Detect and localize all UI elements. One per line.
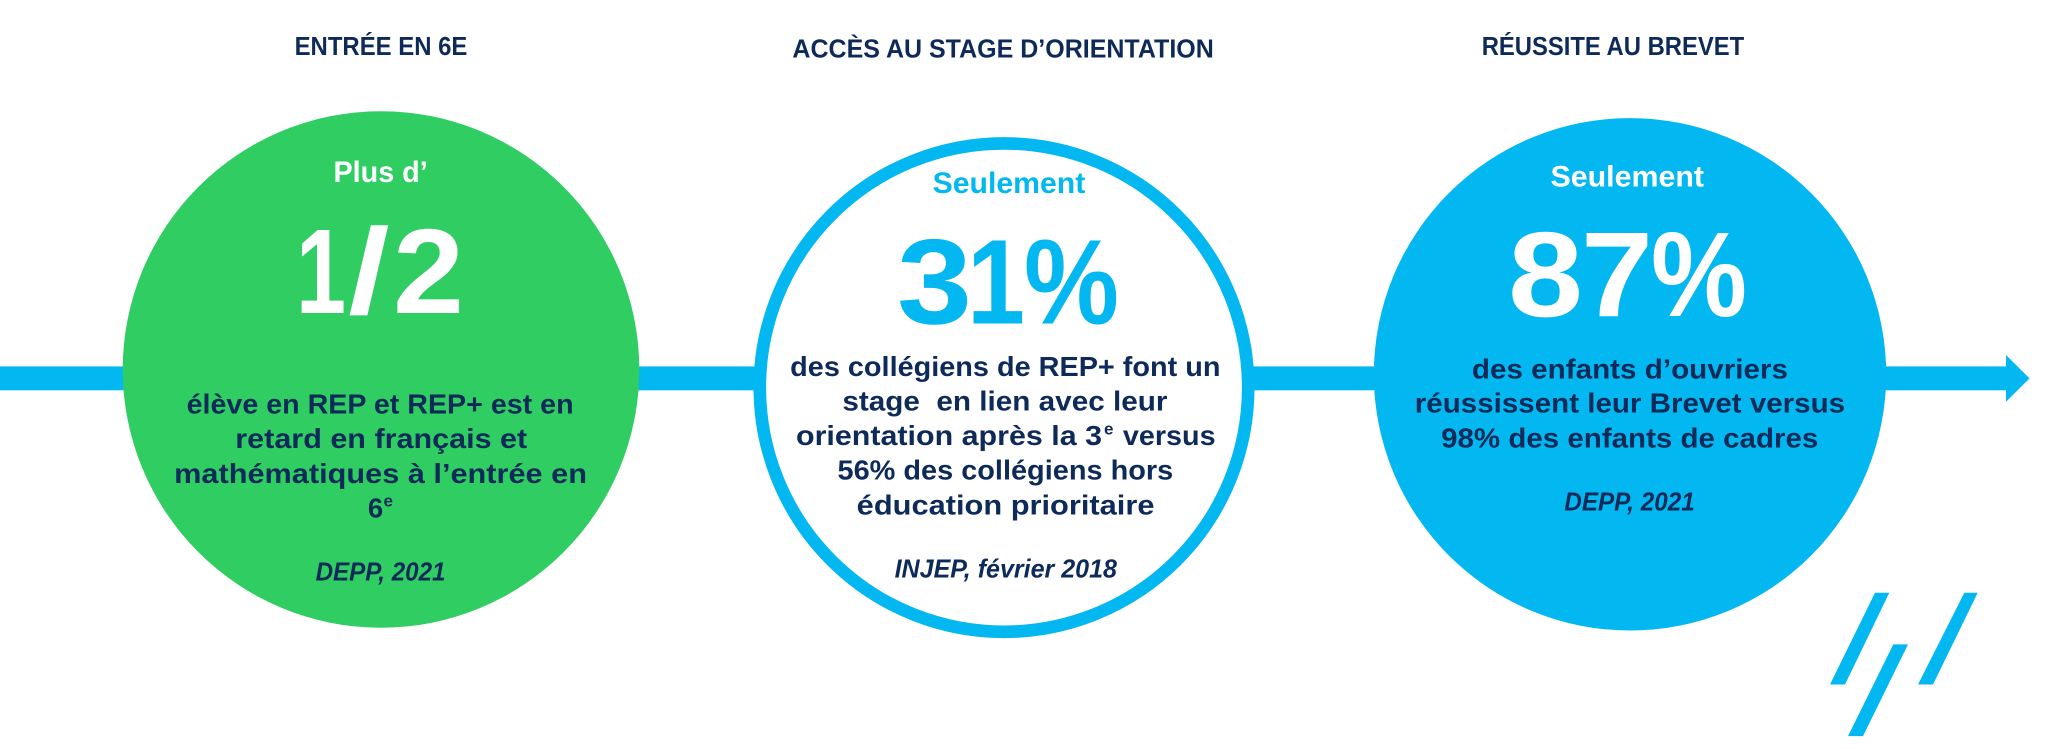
key figure: 31%: 3 [897,213,972,349]
outlined circle [760,143,1248,632]
key figure: 31%: 1 [967,213,1025,349]
description: 98% des enfants de cadres [1441,423,1818,454]
description [790,351,1220,520]
description: e [384,492,393,510]
source: DEPP, 2021 [316,556,446,586]
arrow: timeline [0,355,2030,402]
key figure: 31%: % [1024,213,1119,349]
heading: réussite au brevet: RÉUSSITE AU BREVET [1482,32,1745,61]
lead-in: plus d': Plus d’ [334,156,428,189]
description: 56% des collégiens hors [838,455,1173,486]
description: des collégiens de REP+ font un [790,351,1220,382]
description: retard en français et [235,423,527,454]
panel: accès au stage d'orientation [760,143,1248,632]
key figure: 1/2: 2 [393,203,464,339]
panel: entrée en 6e [123,111,639,628]
panel: réussite au brevet [1374,118,1886,630]
description: réussissent leur Brevet versus [1415,388,1845,419]
description: mathématiques à l’entrée en [174,458,587,489]
source: INJEP, février 2018 [895,554,1118,584]
description: éducation prioritaire [857,490,1154,520]
icon: slanted stripes logo [1830,593,1978,736]
description [174,389,587,523]
lead-in: seulement: Seulement [1550,160,1704,193]
heading: entrée en 6e: ENTRÉE EN 6E [295,32,467,61]
key figure: 87%: % [1651,206,1747,342]
description: 6 [368,492,383,523]
lead-in: seulement: Seulement [933,167,1085,200]
description: des enfants d’ouvriers [1472,353,1788,384]
description [1415,353,1845,454]
description: orientation après la 3 [796,420,1102,451]
description: stage en lien avec leur [842,385,1168,416]
description: élève en REP et REP+ est en [187,389,574,420]
blue circle [1374,118,1886,630]
key figure: 87%: 8 [1508,206,1583,342]
description: versus [1123,420,1216,451]
heading: accès au stage d'orientation: ACCÈS AU STAGE D’ORIENTATION [792,34,1214,63]
key figure: 87%: 7 [1581,206,1653,342]
key figure: 1/2: 1 [296,203,346,339]
green circle [123,111,639,628]
description: e [1104,420,1113,438]
key figure: 1/2: / [348,203,390,339]
source: DEPP, 2021 [1564,487,1695,517]
